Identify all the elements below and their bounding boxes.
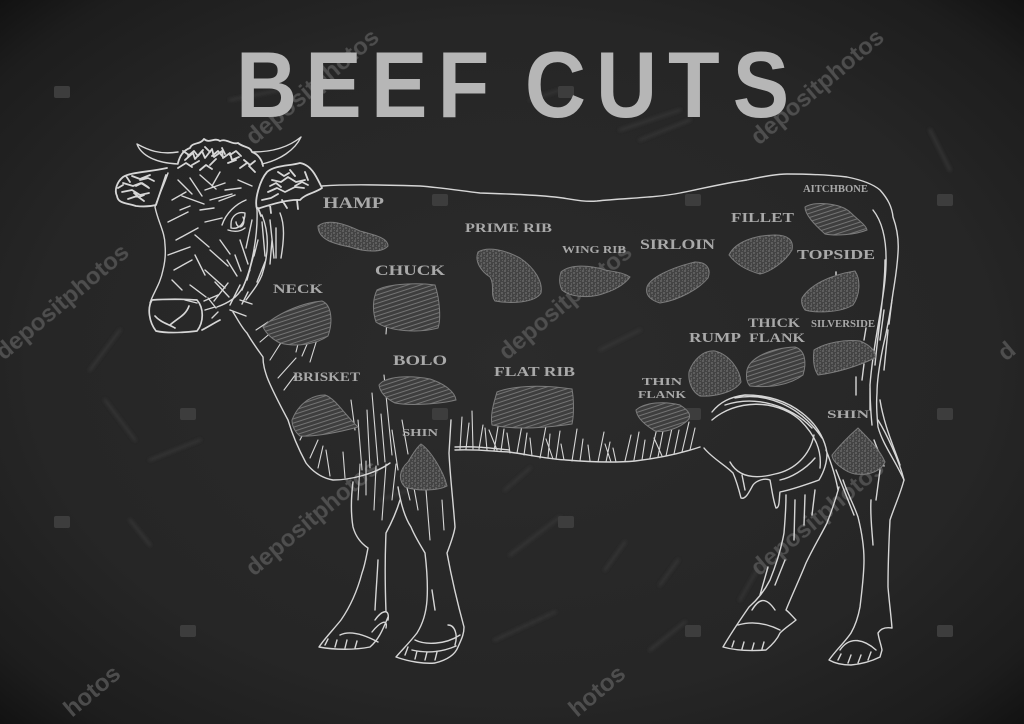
label: prime rib: PRIME RIB: [465, 220, 552, 235]
label: thick flank: FLANK: [749, 330, 806, 345]
cut: hamp: [318, 222, 388, 251]
cut: rump: [689, 351, 741, 396]
watermarks: hotos: [59, 660, 126, 723]
cut: prime rib: [477, 249, 541, 302]
front far leg: [396, 420, 464, 663]
watermarks: depositphotos: [241, 24, 385, 151]
cut: aitchbone: [805, 204, 867, 235]
cut: silverside: [813, 340, 875, 375]
cut: flat rib: [491, 386, 574, 428]
cut: brisket: [292, 395, 358, 436]
chalk smudges: [90, 90, 950, 650]
label: rear shin: SHIN: [827, 407, 869, 421]
belly line: [455, 447, 700, 462]
watermarks: depositphotos: [241, 455, 385, 582]
watermarks: depositphotos: [746, 24, 890, 151]
watermarks: hotos: [564, 660, 631, 723]
cut: topside: [802, 271, 859, 312]
right ear: [256, 163, 322, 216]
watermark camera icons: [54, 86, 953, 637]
label: sirloin: SIRLOIN: [640, 237, 715, 253]
cut: front shin: [400, 444, 447, 490]
label: aitchbone: AITCHBONE: [803, 184, 868, 195]
label: thick flank: THICK: [748, 315, 801, 330]
back and rump outline: [322, 174, 904, 480]
label: thin flank: THIN: [642, 376, 682, 388]
rear far leg: [829, 420, 904, 665]
title: BEEFCUTS: [236, 32, 789, 137]
watermarks: depositphotos: [494, 239, 638, 366]
label: flat rib: FLAT RIB: [494, 365, 575, 380]
label: hamp: HAMP: [323, 195, 384, 212]
cut: rear shin: [832, 428, 885, 474]
head: [116, 137, 322, 332]
watermarks: d: [993, 336, 1021, 367]
label: rump: RUMP: [689, 331, 742, 346]
label: front shin: SHIN: [402, 427, 438, 439]
belly and chest hair: [256, 320, 695, 540]
chest and brisket outline: [233, 312, 390, 480]
muzzle: [149, 299, 220, 332]
beef cut drawings: [263, 204, 885, 490]
front near leg: [319, 482, 400, 649]
cut: sirloin: [647, 262, 709, 303]
left ear: [116, 168, 167, 206]
label: neck: NECK: [273, 281, 324, 296]
cut: wing rib: [560, 266, 630, 297]
label: fillet: FILLET: [731, 211, 795, 226]
cut: bolo: [379, 377, 456, 404]
cut labels: [273, 184, 875, 439]
label: chuck: CHUCK: [375, 263, 445, 279]
cut: thick flank: [746, 347, 805, 387]
label: thin flank: FLANK: [638, 389, 687, 401]
label: brisket: BRISKET: [293, 369, 360, 384]
cut: thin flank: [636, 403, 690, 431]
cut: fillet: [729, 235, 792, 274]
rear contour lines: [836, 210, 900, 466]
label: bolo: BOLO: [393, 353, 447, 369]
face fur: [168, 172, 276, 318]
cow illustration: [116, 137, 904, 665]
thigh and udder: [704, 395, 838, 508]
cut: chuck: [373, 284, 440, 331]
curly forelock: [178, 139, 263, 172]
watermarks: depositphotos: [746, 455, 890, 582]
label: wing rib: WING RIB: [562, 244, 627, 256]
label: topside: TOPSIDE: [797, 248, 875, 263]
rear near leg: [723, 487, 839, 651]
label: silverside: SILVERSIDE: [811, 319, 875, 330]
face outline: [150, 173, 284, 307]
horns: [137, 137, 301, 164]
cut: neck: [263, 301, 331, 345]
eye: [222, 200, 246, 231]
